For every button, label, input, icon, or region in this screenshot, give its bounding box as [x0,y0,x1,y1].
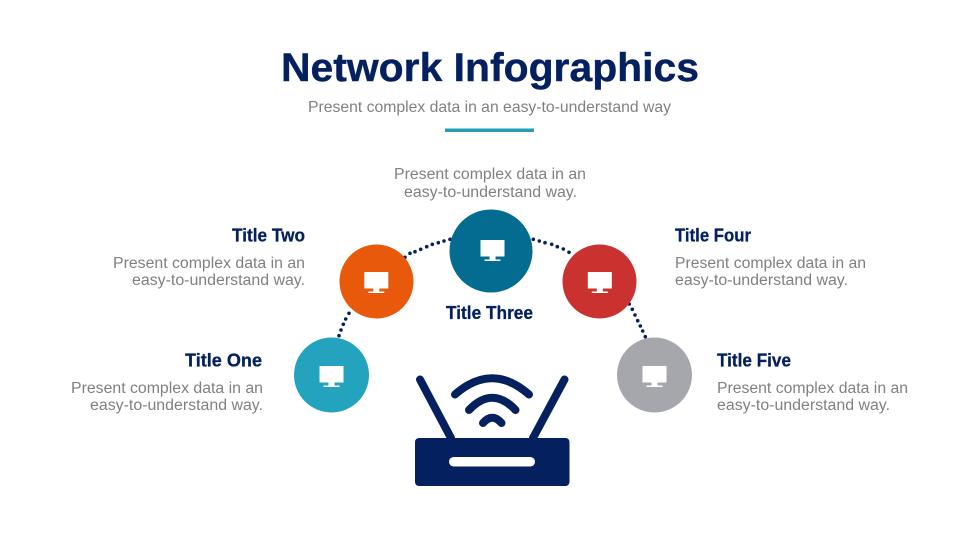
text: Title Three [394,166,586,323]
text: Title Five: easy-to-understand way. [717,397,890,414]
text: Title Three: Title Three [446,303,533,323]
text: Title Five [717,350,908,414]
text: Title Four: easy-to-understand way. [675,272,848,289]
text: Title One: Present complex data in an [71,380,263,397]
text: Title One: easy-to-understand way. [90,397,263,414]
icon: monitor [320,366,344,387]
title underline [445,128,534,132]
dotted connectors [337,238,647,339]
subtitle: Present complex data in an easy-to-understand way [308,99,671,116]
node: Title Two [340,244,414,318]
icon: monitor [642,366,666,387]
icon: monitor [480,240,504,261]
text: Title One [71,350,263,414]
title: Network Infographics [281,46,699,90]
icon: router [415,378,570,486]
node: Title Five [617,338,692,412]
node: Title Three [450,210,532,292]
icon: monitor [588,272,612,293]
text: Title Five: Title Five [717,350,791,370]
text: Title Three: easy-to-understand way. [404,184,577,201]
text: Title Two: easy-to-understand way. [132,272,305,289]
text: Title Four [675,226,866,289]
node: Title One [294,338,369,412]
text: Title Four: Present complex data in an [675,255,866,272]
text: Title Three: Present complex data in an [394,166,586,183]
node: Title Four [562,244,636,318]
text: Title One: Title One [185,350,262,370]
text: Title Four: Title Four [675,226,751,246]
text: Title Two: Title Two [232,226,305,246]
text: Title Two [113,226,305,289]
text: Title Five: Present complex data in an [717,380,908,397]
text: Title Two: Present complex data in an [113,255,305,272]
icon: monitor [364,272,388,293]
